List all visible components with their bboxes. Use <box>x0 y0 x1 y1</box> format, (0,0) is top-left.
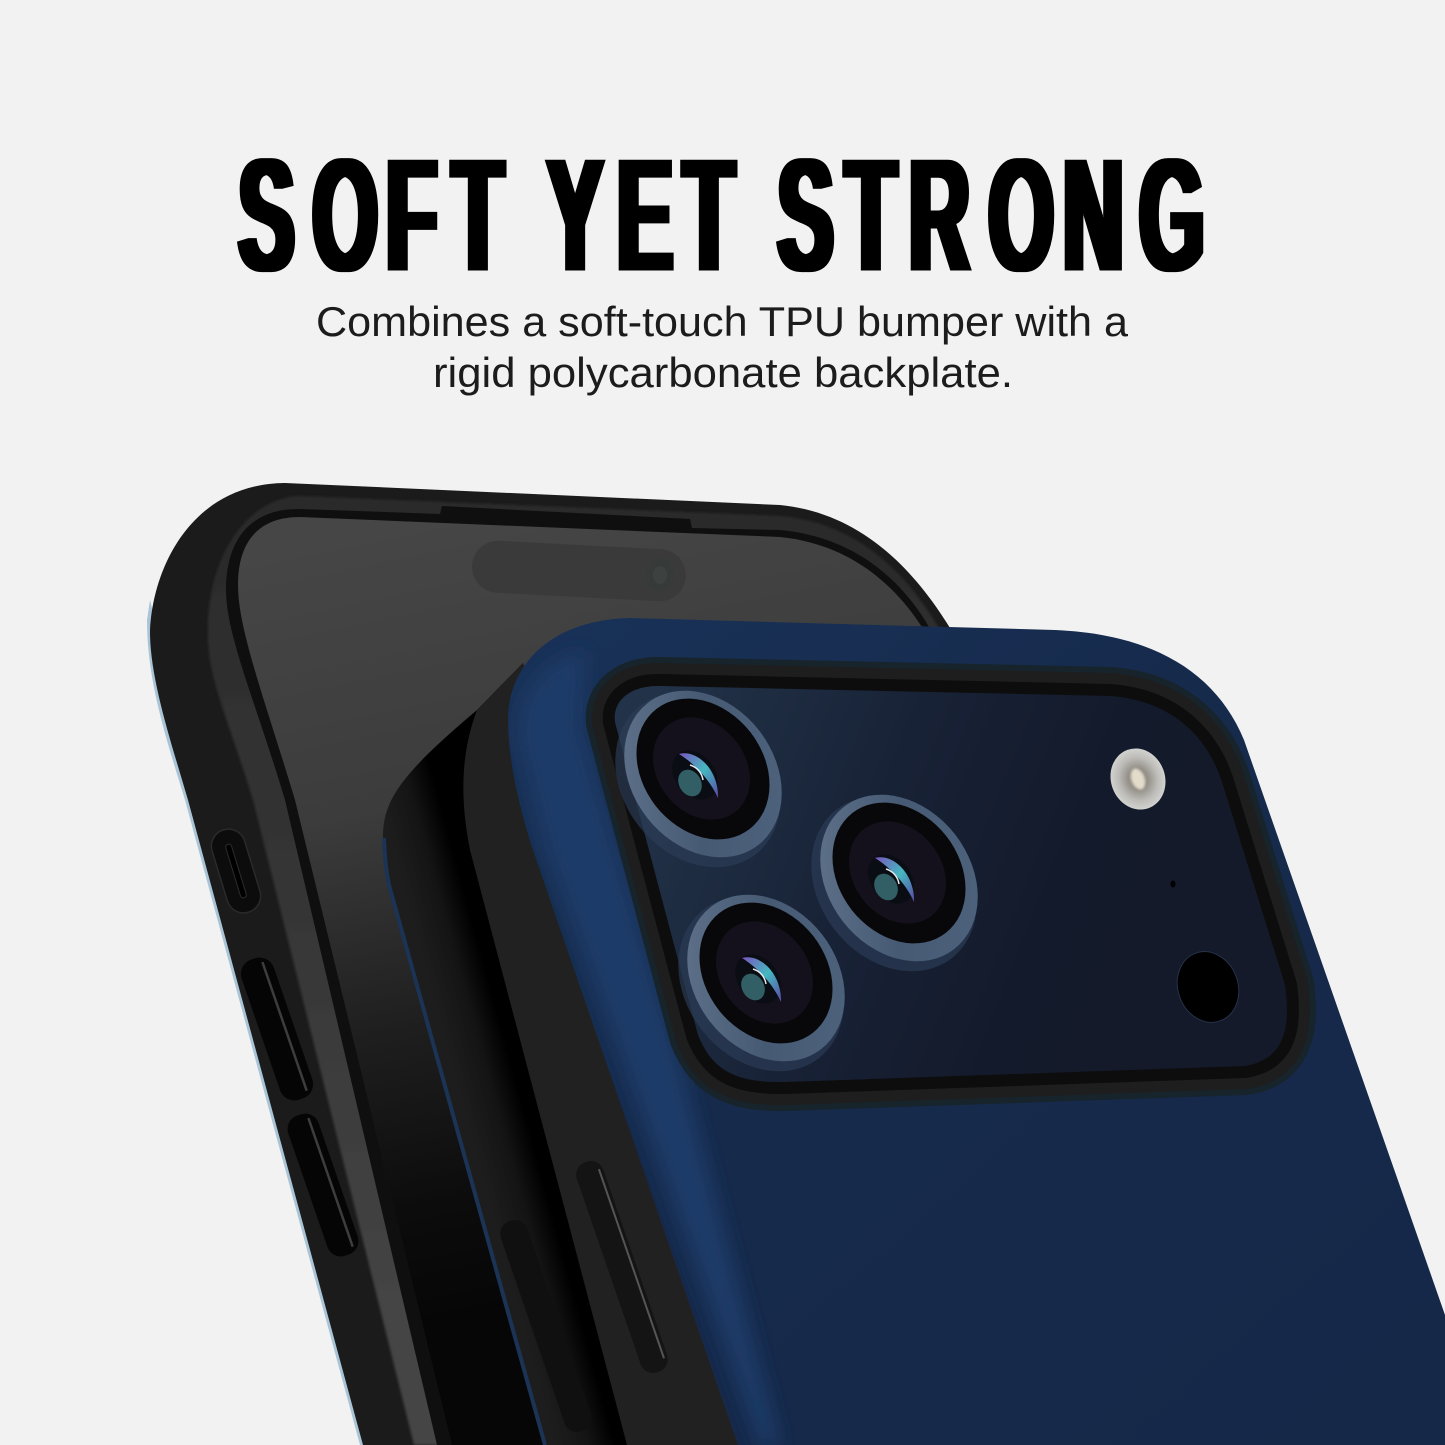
screen <box>238 517 925 1445</box>
camera glass <box>615 686 1287 1082</box>
blue sliver on the side <box>384 838 545 1445</box>
dynamic island <box>471 539 687 603</box>
case outer shell <box>150 483 950 1445</box>
subtitle: rigid polycarbonate backplate. <box>433 349 1013 396</box>
phone: navy case rear view <box>383 618 1445 1445</box>
phone: black case front view <box>147 483 950 1445</box>
title: SOFT YET STRONG <box>239 126 1204 306</box>
lens: bottom <box>644 863 878 1104</box>
edge highlight <box>147 600 375 1445</box>
navy highlight band <box>518 650 780 1445</box>
volume up button <box>237 953 317 1105</box>
case side, black gradient <box>383 663 800 1445</box>
lens: top left <box>581 659 815 900</box>
lens: middle right <box>777 763 1011 1004</box>
camera island rim <box>615 686 1287 1082</box>
side button one <box>497 1216 595 1436</box>
microphone dot <box>1170 880 1176 888</box>
subtitle <box>316 298 1129 396</box>
rim inner dark lip <box>226 506 932 1445</box>
subtitle: Combines a soft-touch TPU bumper with a <box>316 298 1129 345</box>
navy back panel <box>508 618 1445 1445</box>
side button two <box>573 1157 671 1377</box>
case side, lighter band <box>463 663 800 1445</box>
volume down button <box>284 1110 362 1260</box>
rim lighter band <box>208 496 941 1445</box>
lidar sensor <box>1167 943 1249 1031</box>
flash <box>1102 741 1174 817</box>
mute switch button <box>207 825 265 917</box>
